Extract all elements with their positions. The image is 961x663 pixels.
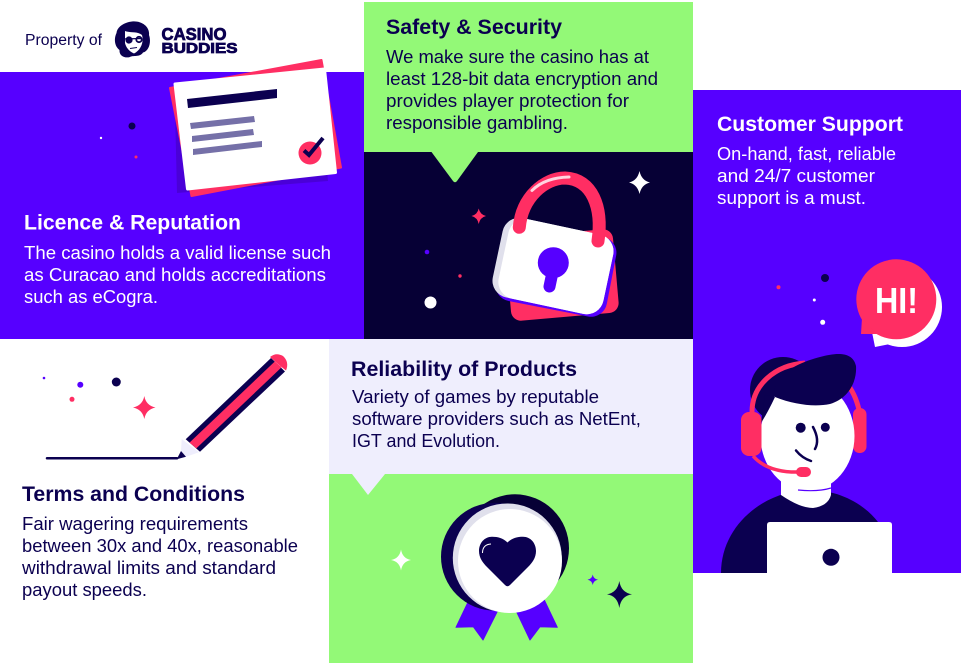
icon: pencil drawing a line [47, 354, 287, 459]
body text: software providers such as NetEnt, [352, 408, 641, 429]
panel: licence and reputation [0, 60, 365, 339]
illustration: support agent with headset [721, 354, 892, 573]
decorative stars [391, 550, 632, 608]
heading: Terms and Conditions [22, 482, 245, 506]
body text: On-hand, fast, reliable [717, 143, 896, 164]
speech bubble: HI! [856, 259, 942, 347]
body text: Variety of games by reputable [352, 386, 599, 407]
header: property of Casino Buddies [25, 21, 238, 57]
heading: Licence & Reputation [24, 210, 241, 234]
decorative dots [100, 122, 138, 158]
body text [21, 513, 298, 600]
logo wordmark [162, 24, 238, 57]
panel: terms and conditions [21, 354, 298, 600]
icon: licence certificate [170, 60, 341, 196]
body text [717, 143, 896, 208]
body text [24, 242, 331, 307]
speech bubble: HI!: HI! [875, 280, 918, 321]
body text: provides player protection for [386, 90, 629, 111]
panel: safety and security [364, 2, 693, 339]
logo wordmark: BUDDIES [162, 40, 238, 57]
heading: Customer Support [717, 112, 903, 136]
panel: reliability of products [329, 339, 693, 663]
body text: as Curacao and holds accreditations [24, 264, 326, 285]
logo wordmark: CASINO [162, 24, 226, 44]
body text: least 128-bit data encryption and [386, 68, 658, 89]
icon: padlock [489, 177, 619, 322]
body text [386, 46, 658, 133]
body text: Fair wagering requirements [22, 513, 248, 534]
heading: Safety & Security [386, 15, 562, 39]
decorative dots [776, 274, 829, 325]
panel: customer support [693, 90, 961, 573]
body text: The casino holds a valid license such [24, 242, 331, 263]
heading: Reliability of Products [351, 357, 577, 381]
text: property of: Property of [25, 32, 103, 49]
icon: award rosette with heart [441, 494, 569, 640]
body text: IGT and Evolution. [352, 430, 500, 451]
body text: and 24/7 customer [717, 165, 875, 186]
pointer [432, 152, 478, 182]
pointer [352, 474, 385, 495]
body text: such as eCogra. [24, 286, 158, 307]
body text [352, 386, 641, 451]
decorative stars and dots [43, 377, 156, 419]
body text: between 30x and 40x, reasonable [22, 535, 298, 556]
body text: support is a must. [717, 187, 866, 208]
body text: withdrawal limits and standard [21, 557, 276, 578]
logo icon: woman with sunglasses [115, 21, 150, 57]
body text: responsible gambling. [386, 112, 568, 133]
body text: payout speeds. [22, 579, 147, 600]
body text: We make sure the casino has at [386, 46, 650, 67]
decorative stars and dots [424, 171, 650, 308]
